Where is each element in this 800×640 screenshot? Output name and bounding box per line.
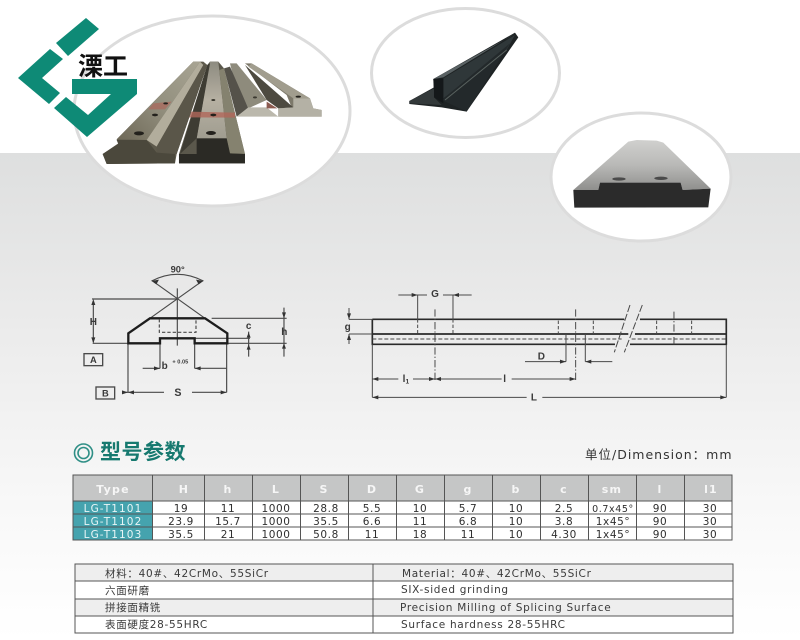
- label: L: L: [531, 393, 537, 404]
- row LG-T1103: 1000: [261, 529, 291, 541]
- logo: 溧工: [78, 53, 128, 81]
- header row: Type: [96, 483, 130, 496]
- datum box A: [84, 354, 103, 366]
- row LG-T1101: 5.7: [459, 503, 477, 515]
- spec: material: [105, 567, 592, 580]
- side view diagram: [345, 289, 726, 404]
- row LG-T1103: 18: [413, 529, 427, 541]
- spec: material: 材料：40#、42CrMo、55SiCr: [105, 567, 269, 580]
- spec: grinding: 六面研磨: [105, 585, 150, 597]
- label: c: c: [246, 321, 252, 332]
- row LG-T1102: 10: [509, 516, 523, 528]
- row LG-T1102: 6.6: [363, 516, 381, 528]
- header row: sm: [602, 483, 622, 496]
- photo: dark T rail in ellipse: [372, 8, 560, 138]
- datum box B: [96, 387, 115, 399]
- row LG-T1101: 10: [413, 503, 427, 515]
- label: S: S: [174, 387, 182, 399]
- background band: [0, 153, 800, 640]
- header row: [73, 475, 732, 501]
- row LG-T1103: 35.5: [168, 529, 194, 541]
- row LG-T1101: 5.5: [363, 503, 381, 515]
- row LG-T1103: 1x45°: [596, 529, 630, 541]
- row LG-T1101: 11: [221, 503, 235, 515]
- spec: milling: 拼接面精铣: [105, 601, 161, 614]
- header row: b: [511, 483, 521, 496]
- header row: h: [223, 483, 233, 496]
- row LG-T1102: 1000: [261, 516, 291, 528]
- row LG-T1102: 90: [653, 516, 667, 528]
- row LG-T1103: 90: [653, 529, 667, 541]
- header row: g: [463, 483, 473, 496]
- label: l: l: [503, 374, 506, 385]
- header row: H: [179, 483, 189, 496]
- row LG-T1102: 30: [703, 516, 717, 528]
- label: G: G: [431, 289, 439, 300]
- label: b tolerance: b: [162, 361, 168, 372]
- row LG-T1102: 3.8: [555, 516, 573, 528]
- label: D: D: [538, 351, 545, 362]
- datum box A: A: [90, 355, 97, 365]
- logo: [18, 18, 137, 137]
- spec: milling: Precision Milling of Splicing Surface: [400, 602, 611, 614]
- spec: hardness: [105, 618, 566, 631]
- label: h: h: [281, 327, 287, 338]
- header row: G: [415, 483, 425, 496]
- header row: D: [367, 483, 377, 496]
- spec: hardness: 表面硬度28-55HRC: [105, 618, 208, 631]
- spec: milling: [105, 601, 611, 614]
- row LG-T1102: 35.5: [313, 516, 339, 528]
- label: l1: l: [403, 374, 405, 385]
- label: l1: 1: [405, 379, 409, 386]
- row LG-T1101: 1000: [261, 503, 291, 515]
- row LG-T1103: [84, 529, 717, 541]
- arrowheads: [91, 280, 286, 394]
- header row: L: [272, 483, 280, 496]
- row LG-T1103: 4.30: [551, 529, 577, 541]
- row LG-T1102: 11: [413, 516, 427, 528]
- row LG-T1101: [84, 503, 717, 515]
- row LG-T1103: LG-T1103: [84, 529, 142, 541]
- row LG-T1103: 10: [509, 529, 523, 541]
- row LG-T1101: 19: [174, 503, 188, 515]
- datum box B: B: [102, 388, 109, 398]
- arrowheads: [347, 293, 726, 399]
- header row: l1: [704, 483, 718, 496]
- row LG-T1101: 90: [653, 503, 667, 515]
- row LG-T1102: 15.7: [215, 516, 241, 528]
- row LG-T1102: LG-T1102: [84, 516, 142, 528]
- row LG-T1101: 28.8: [313, 503, 339, 515]
- row LG-T1101: 30: [703, 503, 717, 515]
- row LG-T1103: 11: [461, 529, 475, 541]
- row LG-T1103: 50.8: [313, 529, 339, 541]
- row LG-T1102: 23.9: [168, 516, 194, 528]
- spec: material: Material：40#、42CrMo、55SiCr: [402, 568, 592, 580]
- header row: l: [658, 483, 662, 496]
- parameter table: [73, 475, 732, 541]
- label: g: g: [345, 322, 351, 333]
- section heading: 型号参数: [100, 440, 186, 464]
- row LG-T1101: LG-T1101: [84, 503, 142, 515]
- label: H: H: [90, 317, 97, 328]
- row LG-T1101: 0.7x45°: [592, 504, 634, 515]
- row LG-T1103: 11: [365, 529, 379, 541]
- label: b tolerance: + 0.05: [172, 360, 188, 366]
- photo: silver rail end in ellipse: [551, 113, 731, 241]
- photo: four steel rails in ellipse: [74, 16, 350, 206]
- row LG-T1103: 30: [703, 529, 717, 541]
- spec: grinding: [105, 584, 509, 597]
- unit label: 单位/Dimension：mm: [585, 447, 733, 462]
- header row: S: [319, 483, 329, 496]
- row LG-T1102: 1x45°: [596, 516, 630, 528]
- row LG-T1101: 10: [509, 503, 523, 515]
- row LG-T1102: 6.8: [459, 516, 477, 528]
- row LG-T1103: 21: [221, 529, 235, 541]
- cross-section diagram: [84, 264, 287, 399]
- header row: c: [560, 483, 568, 496]
- row LG-T1101: 2.5: [555, 503, 573, 515]
- spec: grinding: SIX-sided grinding: [401, 584, 509, 596]
- specification table: [75, 564, 733, 633]
- spec: hardness: Surface hardness 28-55HRC: [401, 619, 566, 631]
- row LG-T1102: [84, 516, 717, 528]
- label: 90 degree angle: 90°: [171, 264, 185, 274]
